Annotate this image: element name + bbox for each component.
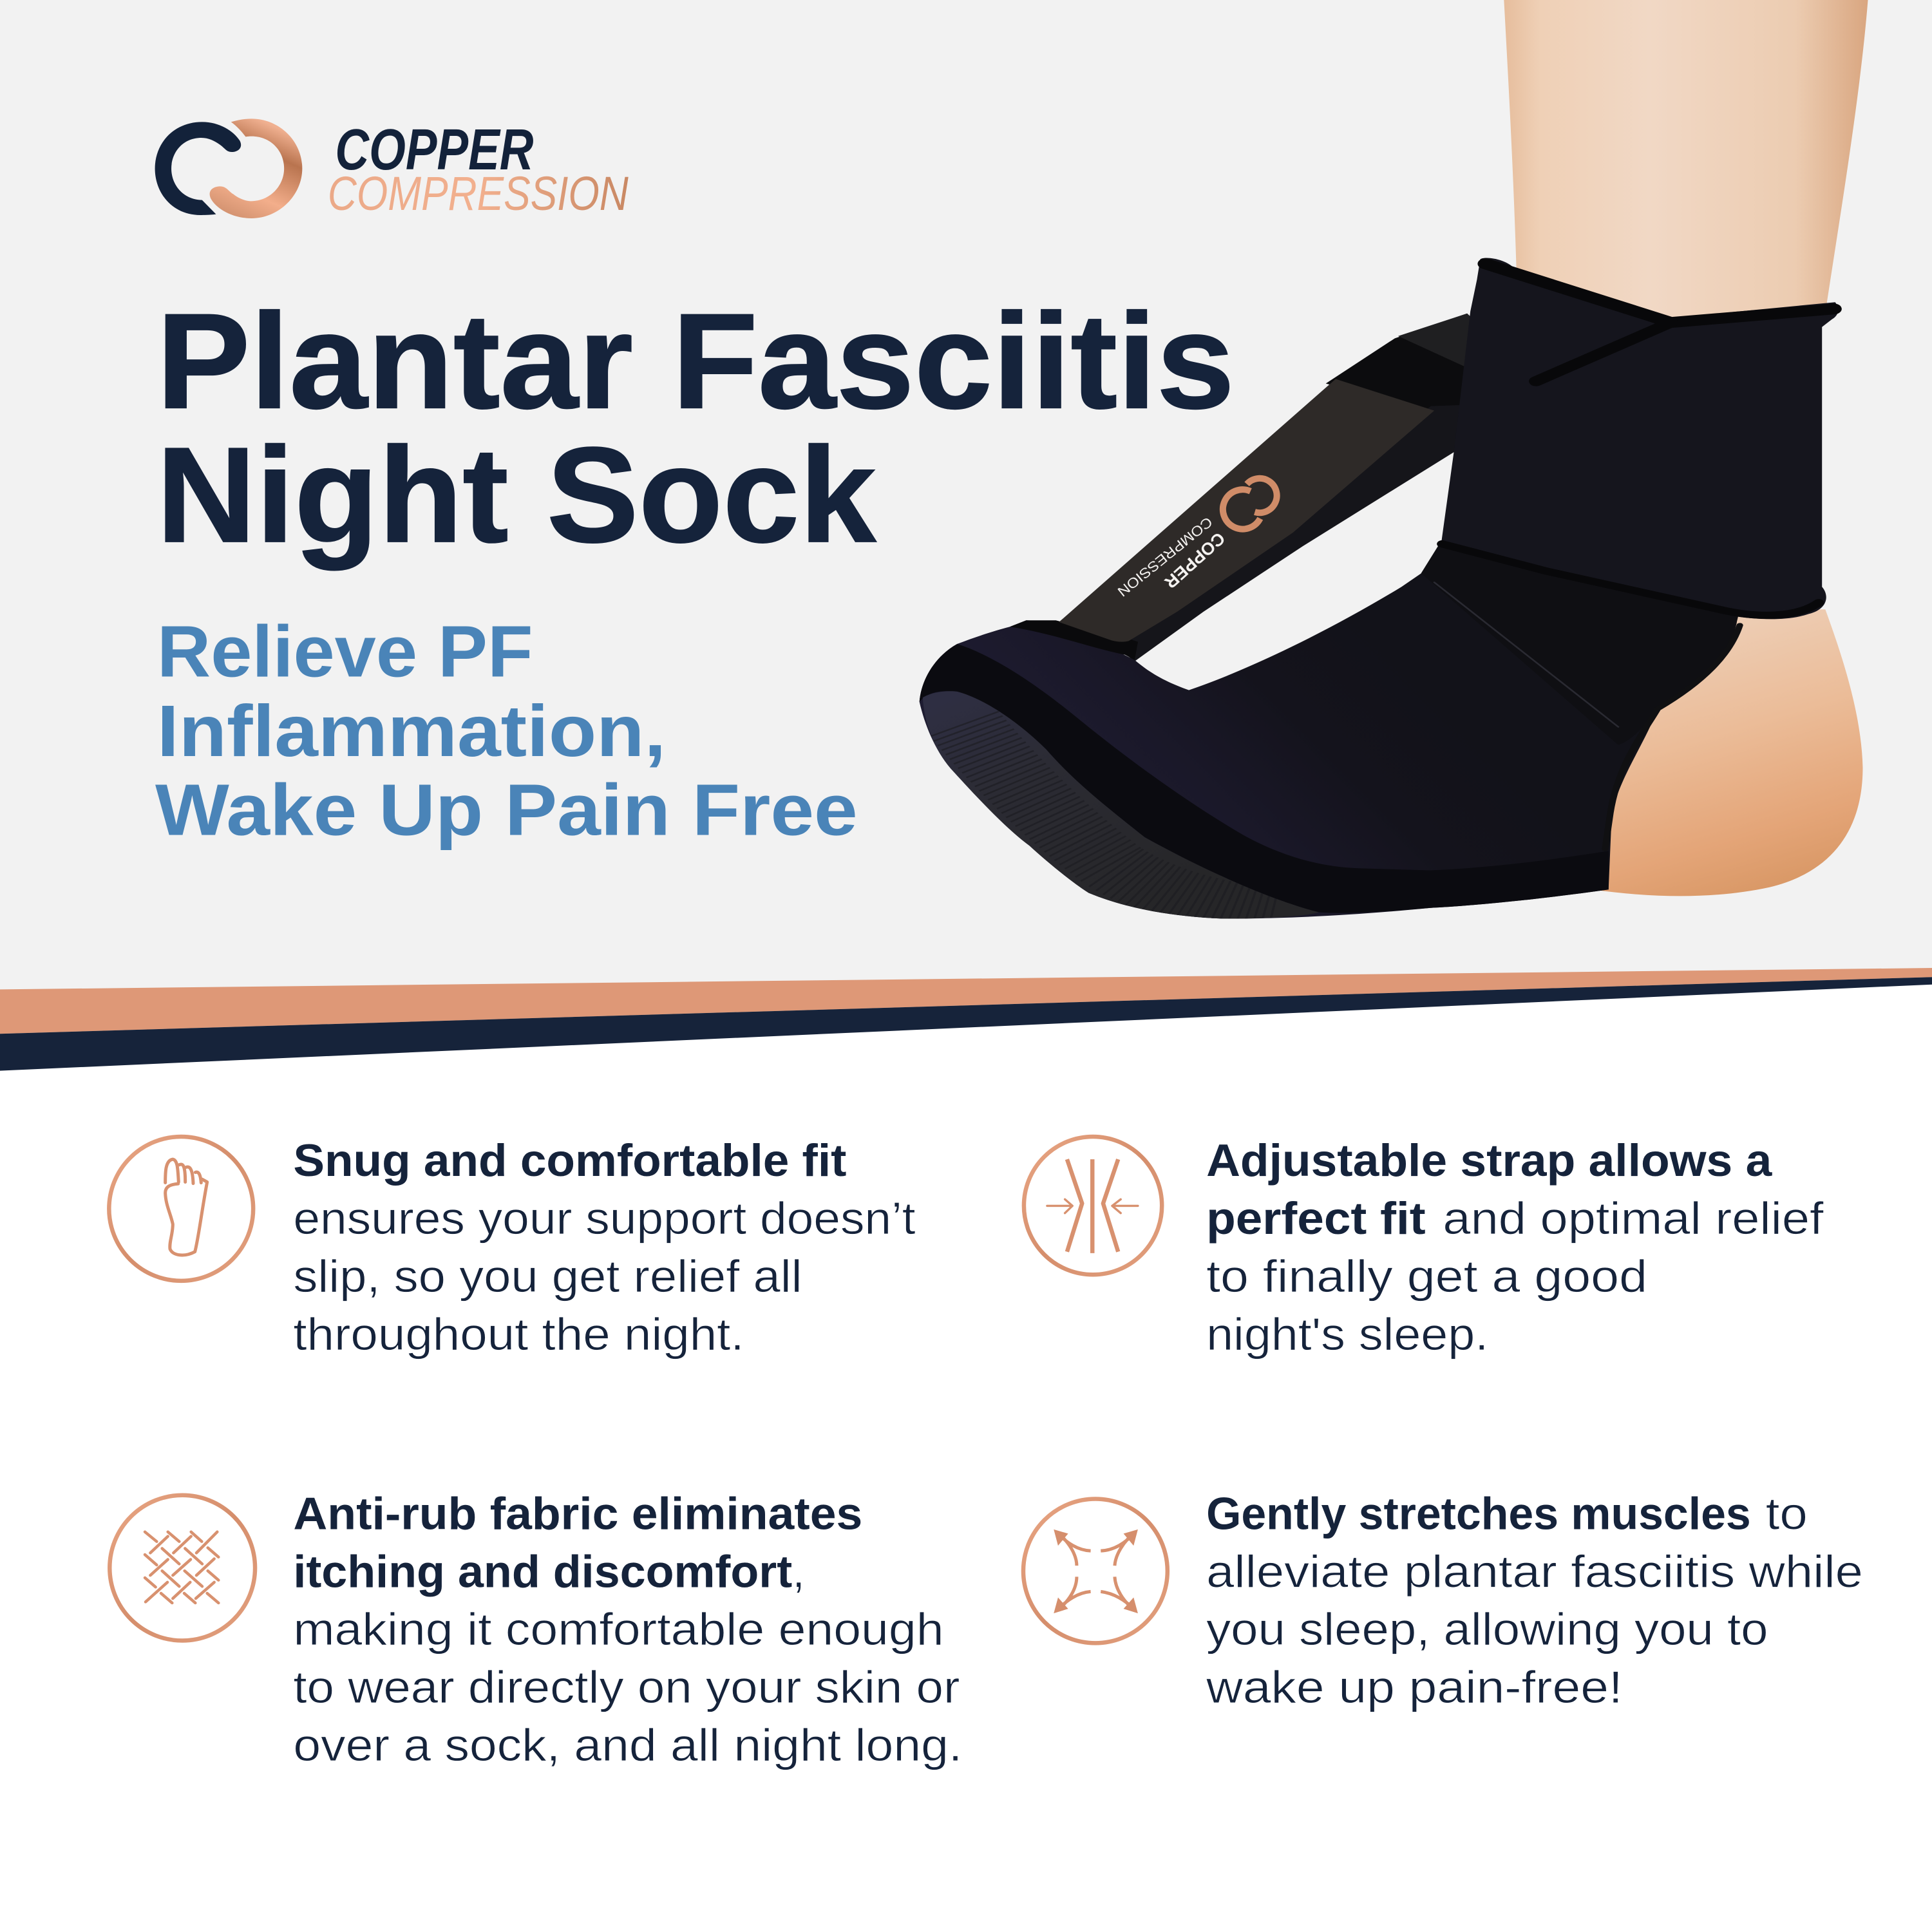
icon: outward arrows xyxy=(1023,1499,1168,1643)
ankle panel xyxy=(1421,542,1740,745)
feature: snug fit xyxy=(109,1135,916,1360)
white lower background xyxy=(0,985,1932,1932)
text block: slip, so you get relief all xyxy=(293,1251,802,1302)
text block: Anti-rub fabric eliminates xyxy=(293,1488,862,1539)
text block: night's sleep. xyxy=(1206,1309,1488,1360)
toe collar xyxy=(1010,620,1138,660)
text block: perfect fit xyxy=(1206,1193,1426,1244)
cuff seams xyxy=(1434,264,1834,849)
text block: wake up pain-free! xyxy=(1206,1662,1623,1713)
strap wordmark: COMPRESSION xyxy=(1115,514,1216,600)
icon: logo rings xyxy=(155,118,302,218)
text block: itching and discomfort xyxy=(293,1546,792,1597)
text block: Snug and comfortable fit xyxy=(293,1135,846,1186)
title: Night Sock xyxy=(156,419,876,571)
foot body xyxy=(920,543,1737,919)
text block: to xyxy=(1766,1488,1808,1539)
black rim band xyxy=(920,644,1609,913)
leg skin xyxy=(1504,0,1868,333)
icon: compression arrows xyxy=(1024,1137,1162,1274)
ankle cuff wrap xyxy=(1441,258,1838,619)
sole ribs xyxy=(964,723,1276,914)
text block: throughout the night. xyxy=(293,1309,744,1360)
logo wordmark xyxy=(328,118,629,220)
velcro strap xyxy=(1059,379,1434,642)
product photo: foot wearing night sock xyxy=(920,0,1868,919)
text block: making it comfortable enough xyxy=(293,1604,944,1655)
strap wordmark: COPPER xyxy=(1161,529,1229,592)
text block: Gently stretches muscles xyxy=(1206,1488,1751,1539)
feature: adjustable strap xyxy=(1024,1135,1824,1360)
text block: over a sock, and all night long. xyxy=(293,1720,962,1771)
foot of the sock xyxy=(920,543,1737,919)
icon: foot xyxy=(109,1137,253,1281)
text block: to finally get a good xyxy=(1206,1251,1647,1302)
ankle cuff and top strap xyxy=(1059,258,1838,849)
text block: ensures your support doesn’t xyxy=(293,1193,916,1244)
text block: and optimal relief xyxy=(1443,1193,1824,1244)
heel skin xyxy=(1579,609,1862,896)
text block: alleviate plantar fasciitis while xyxy=(1206,1546,1863,1597)
text block: you sleep, allowing you to xyxy=(1206,1604,1768,1655)
text block: , xyxy=(792,1546,805,1597)
logo wordmark: COPPER xyxy=(335,118,534,182)
logo wordmark: COMPRESSION xyxy=(328,167,629,220)
sole xyxy=(923,691,1319,919)
title xyxy=(156,285,1235,571)
text block xyxy=(293,1488,962,1771)
subtitle xyxy=(155,611,858,851)
subtitle: Wake Up Pain Free xyxy=(155,770,858,851)
text block: to wear directly on your skin or xyxy=(293,1662,960,1713)
logo: Copper Compression xyxy=(155,118,629,220)
text block xyxy=(1206,1135,1824,1360)
subtitle: Relieve PF xyxy=(157,611,533,692)
feature: gentle stretch xyxy=(1023,1488,1863,1713)
top background panel xyxy=(0,0,1932,1035)
text block: Adjustable strap allows a xyxy=(1206,1135,1772,1186)
text block xyxy=(293,1135,916,1360)
lower strap and buckle strap xyxy=(1112,314,1525,661)
text block xyxy=(1206,1488,1863,1713)
diagonal divider band xyxy=(0,968,1932,1071)
icon: woven fabric xyxy=(109,1495,255,1641)
title: Plantar Fasciitis xyxy=(156,285,1235,437)
strap logo rings xyxy=(1223,478,1277,529)
feature: anti-rub fabric xyxy=(109,1488,962,1771)
heel and lower strap xyxy=(1112,314,1862,896)
subtitle: Inflammation, xyxy=(157,690,666,772)
